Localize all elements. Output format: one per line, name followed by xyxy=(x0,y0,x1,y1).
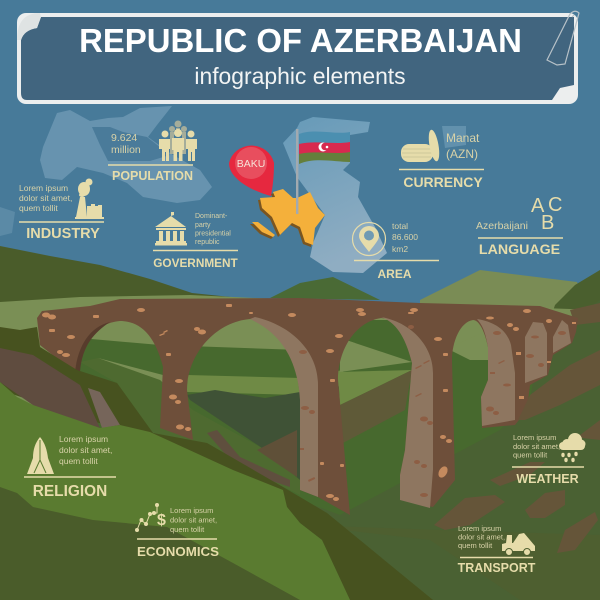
text: area: 86.600 xyxy=(392,232,418,242)
text: economics: Lorem ipsum xyxy=(170,506,213,515)
text: area: km2 xyxy=(392,244,408,254)
text: government type: presidential xyxy=(195,230,231,238)
population block: million xyxy=(111,144,141,156)
weather block xyxy=(512,433,586,486)
icon: truck xyxy=(502,533,535,556)
letters icon: A xyxy=(531,195,545,217)
arch shadow xyxy=(75,322,110,372)
icon: people xyxy=(159,120,197,161)
text: area: total xyxy=(392,221,408,231)
icon: chart with dollar: $ xyxy=(157,512,166,529)
icon: government building xyxy=(155,212,187,246)
heading: religion: RELIGION xyxy=(33,483,107,500)
location marker: Baku: BAKU xyxy=(237,158,265,170)
map: Caspian region xyxy=(283,117,387,273)
heading: population: POPULATION xyxy=(112,169,193,183)
text: weather: Lorem ipsum xyxy=(513,433,556,442)
icon: coins xyxy=(401,129,441,162)
bridge xyxy=(37,298,578,515)
text: currency: Manat xyxy=(446,131,480,145)
text: religion: Lorem ipsum xyxy=(59,434,108,444)
text: currency xyxy=(446,131,480,161)
heading: government: GOVERNMENT xyxy=(153,256,239,270)
text: weather: dolor sit amet, xyxy=(513,442,560,451)
letters icon: C xyxy=(548,194,562,216)
grey rock xyxy=(0,348,100,428)
text: transport xyxy=(458,524,505,550)
letters icon xyxy=(531,194,562,234)
heading: transport: TRANSPORT xyxy=(458,561,536,575)
map: small patch near currency xyxy=(442,126,466,148)
flag and pin group xyxy=(229,129,350,247)
heading: economics: ECONOMICS xyxy=(137,544,219,559)
icon: rain cloud xyxy=(559,433,586,462)
government block xyxy=(153,212,239,270)
title: REPUBLIC OF AZERBAIJAN xyxy=(79,22,522,59)
text: area xyxy=(392,221,418,254)
text: currency: (AZN) xyxy=(446,147,478,161)
subtitle: infographic elements xyxy=(194,63,406,89)
title panel xyxy=(17,11,579,104)
icon: factory xyxy=(75,178,104,219)
distant hills xyxy=(0,246,600,340)
map: west edge xyxy=(0,207,15,236)
population figures: 9.624 xyxy=(111,132,137,144)
currency block xyxy=(399,129,484,190)
text: government type: Dominant- xyxy=(195,213,228,220)
text: religion: quem tollit xyxy=(59,456,98,466)
language block xyxy=(476,194,563,258)
letters icon: B xyxy=(541,212,554,234)
paper clip xyxy=(547,11,579,65)
brown patches on right slope xyxy=(434,350,600,553)
text: weather: quem tollit xyxy=(513,450,548,460)
heading: language: LANGUAGE xyxy=(479,242,560,258)
area block xyxy=(352,221,439,281)
country map xyxy=(250,189,325,247)
text: government type xyxy=(195,213,231,246)
text: religion: dolor sit amet, xyxy=(59,445,112,455)
dark green foreground xyxy=(0,487,300,600)
text: weather xyxy=(513,433,560,460)
bricks xyxy=(42,304,576,501)
heading: area: AREA xyxy=(377,267,412,281)
population block xyxy=(108,120,197,183)
map: inner water notch xyxy=(92,127,170,161)
landscape behind the bridge xyxy=(0,295,600,600)
text: industry: dolor sit amet, xyxy=(19,193,72,203)
heading: weather: WEATHER xyxy=(516,472,579,486)
text: language: Azerbaijani xyxy=(476,220,528,232)
text: industry: quem tollit xyxy=(19,203,58,213)
transport block xyxy=(458,524,536,575)
icon: area pin xyxy=(352,222,386,256)
industry block xyxy=(19,178,104,242)
text: transport: quem tollit xyxy=(458,541,493,550)
bright green slope xyxy=(0,382,350,600)
economics block xyxy=(135,503,219,559)
heading: industry: INDUSTRY xyxy=(26,226,100,242)
text: economics: dolor sit amet, xyxy=(170,516,217,524)
text: industry: Lorem ipsum xyxy=(19,183,68,193)
text: government type: republic xyxy=(195,239,220,246)
light rock xyxy=(88,388,120,428)
map: Black Sea region xyxy=(40,106,212,203)
text: government type: party xyxy=(195,222,211,229)
flag xyxy=(299,131,350,164)
dark ridge xyxy=(0,327,433,600)
text: religion xyxy=(59,434,112,466)
text: economics xyxy=(170,506,217,534)
flagpole xyxy=(296,129,298,214)
text: industry xyxy=(19,183,72,213)
heading: currency: CURRENCY xyxy=(403,174,483,190)
icon: praying hands xyxy=(27,437,54,474)
text: transport: dolor sit amet, xyxy=(458,532,505,542)
religion block xyxy=(24,434,116,500)
text: transport: Lorem ipsum xyxy=(458,524,501,533)
arch undersides xyxy=(250,317,571,508)
text: economics: quem tollit xyxy=(170,525,205,534)
